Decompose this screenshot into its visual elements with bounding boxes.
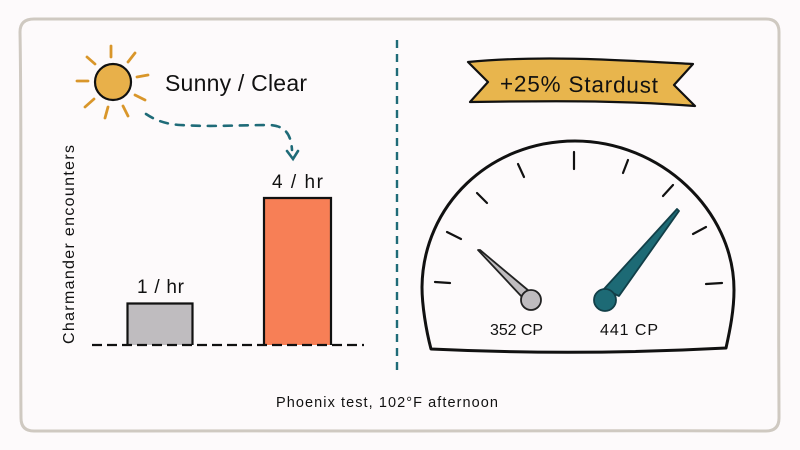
label: 441 CP: 441 CP [600, 322, 658, 339]
gauge dial [422, 141, 734, 352]
label: 352 CP: 352 CP [490, 322, 543, 339]
banner: +25% Stardust [468, 58, 695, 106]
gauge [422, 141, 734, 352]
banner: +25% Stardust: +25% Stardust [500, 71, 659, 98]
icon: sun [77, 46, 148, 118]
panel: sunny weather encounters [61, 46, 364, 345]
arrow: sun to orange bar [146, 114, 298, 159]
footnote: Phoenix test, 102°F afternoon [276, 395, 498, 411]
label: 4 / hr: 4 / hr [272, 172, 324, 193]
panel: stardust and CP [422, 58, 734, 352]
needle: 441 CP [594, 209, 679, 311]
y-axis label: Charmander encounters [61, 145, 78, 344]
heading: Sunny / Clear: Sunny / Clear [165, 70, 307, 96]
bar: sunny 4 per hour [264, 198, 331, 345]
needle: 352 CP [478, 250, 541, 310]
bar chart: encounters per hour [92, 172, 364, 345]
bar: cloudy 1 per hour [128, 304, 192, 345]
label: 1 / hr: 1 / hr [137, 277, 185, 298]
baseline [92, 344, 364, 346]
